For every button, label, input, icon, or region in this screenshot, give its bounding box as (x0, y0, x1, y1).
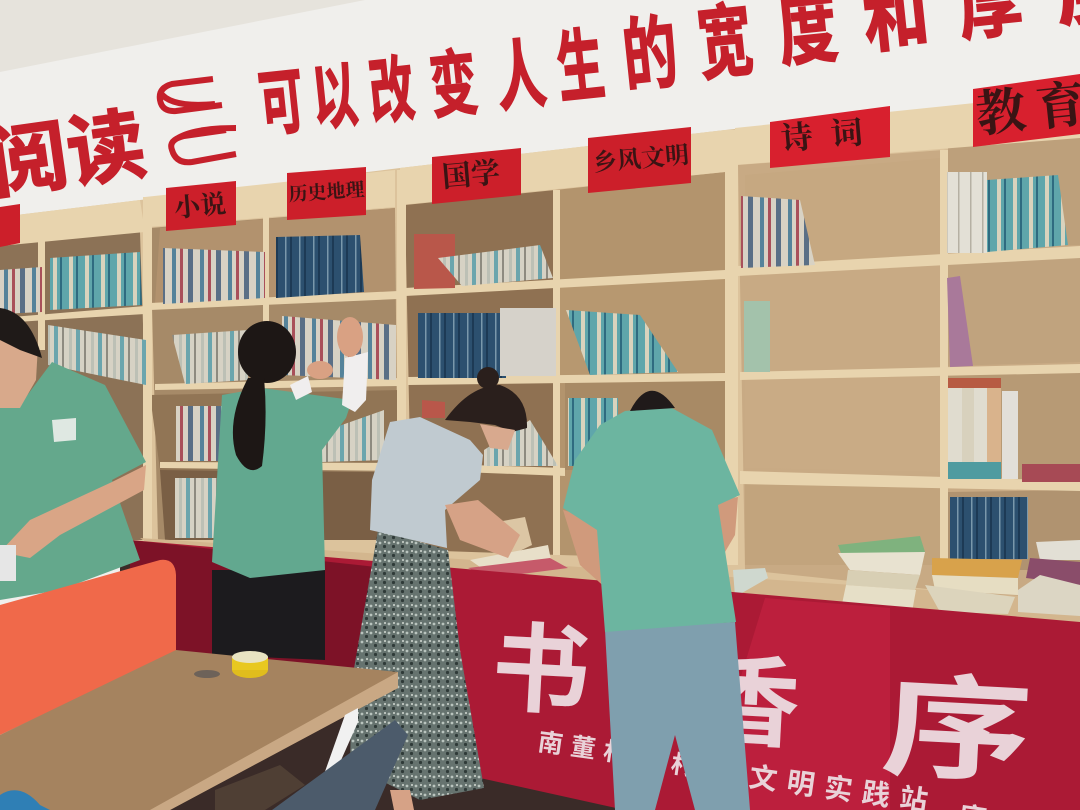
wall slogan (0, 0, 1080, 209)
red banner: 村 (669, 750, 698, 781)
category labels: 乡风文明 (592, 141, 690, 177)
person: woman with ponytail (212, 317, 368, 660)
wall slogan: 改 (365, 49, 418, 134)
wall slogan: 以 (308, 55, 361, 140)
chair (215, 720, 408, 810)
person: woman in grey top and patterned skirt (350, 367, 527, 810)
wall slogan: 生 (553, 21, 608, 113)
red banner: 南董村 (536, 728, 638, 770)
open books on counter (468, 517, 768, 597)
counter top (140, 538, 1080, 622)
red banner: 书 (489, 613, 593, 728)
spines: lower right shelf (948, 378, 1018, 479)
category labels: 诗词 (779, 112, 882, 157)
person: woman at far left (0, 308, 146, 600)
wall slogan: 人 (492, 31, 550, 122)
stack of books 2 (925, 558, 1022, 614)
category labels: 小说 (173, 190, 227, 223)
blue cloth at bottom-left (0, 790, 50, 810)
stack of books 3 (1018, 540, 1080, 616)
ceiling (0, 0, 365, 72)
bookshelf (0, 92, 1080, 625)
wall slogan: 的 (619, 8, 682, 102)
floor (120, 540, 640, 810)
person: man bending over, jeans (563, 391, 750, 810)
red banner (130, 540, 1080, 810)
category labels: 国学 (441, 156, 501, 194)
red banner: 香 (699, 646, 803, 761)
red banner: 序 (879, 664, 1035, 797)
category labels: 历史地理 (288, 179, 365, 206)
stack of books 1 (838, 536, 925, 612)
wall slogan: 变 (426, 42, 481, 127)
uprights (38, 240, 45, 350)
shelf boards (0, 92, 1080, 570)
books (0, 172, 1080, 616)
tape roll (232, 651, 268, 678)
desk with orange divider (0, 560, 398, 810)
wall slogan: 可 (255, 61, 308, 146)
category labels (0, 74, 1080, 247)
